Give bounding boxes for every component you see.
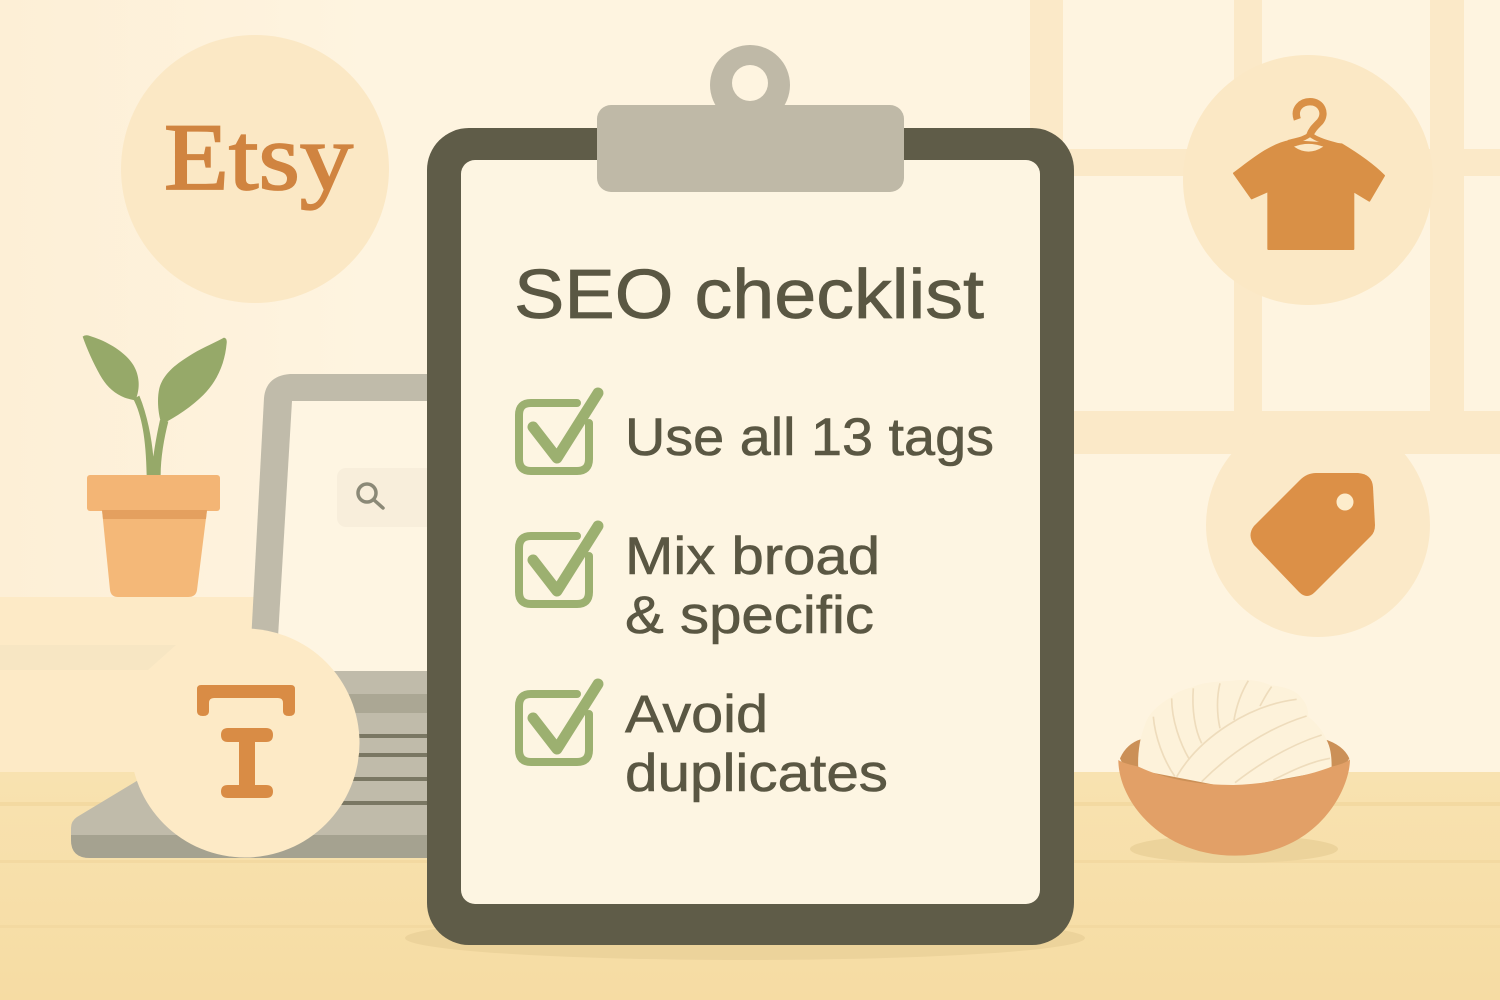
checklist item 1: Use all 13 tags (625, 408, 994, 467)
laptop (71, 374, 440, 858)
shelf (0, 597, 260, 777)
checklist item 3: duplicates (625, 744, 888, 803)
heading: SEO checklist (514, 255, 984, 333)
badge: text tool (130, 628, 360, 858)
clipboard (427, 45, 1074, 945)
yarn bowl (1118, 680, 1350, 856)
badge: price tag (1206, 413, 1430, 637)
badge: Etsy logo: Etsy (164, 104, 354, 210)
checklist item 3: Avoid (625, 685, 768, 744)
checklist item 3 (519, 684, 888, 803)
paper (461, 160, 1040, 904)
desk surface (0, 772, 1500, 1000)
window frame (1030, 0, 1500, 780)
checklist item 2 (519, 526, 880, 645)
bowl shadow (1130, 835, 1338, 863)
checklist item 2: Mix broad (625, 527, 880, 586)
badge: t-shirt (1183, 55, 1433, 305)
clip (597, 45, 904, 192)
wall background (0, 0, 1500, 780)
badge: Etsy logo (121, 35, 389, 303)
clipboard board (427, 128, 1074, 945)
search bar (337, 468, 440, 527)
icon: potted plant (83, 335, 227, 597)
checklist item 1 (519, 393, 994, 471)
checklist item 2: & specific (625, 586, 874, 645)
clipboard shadow (405, 916, 1085, 960)
